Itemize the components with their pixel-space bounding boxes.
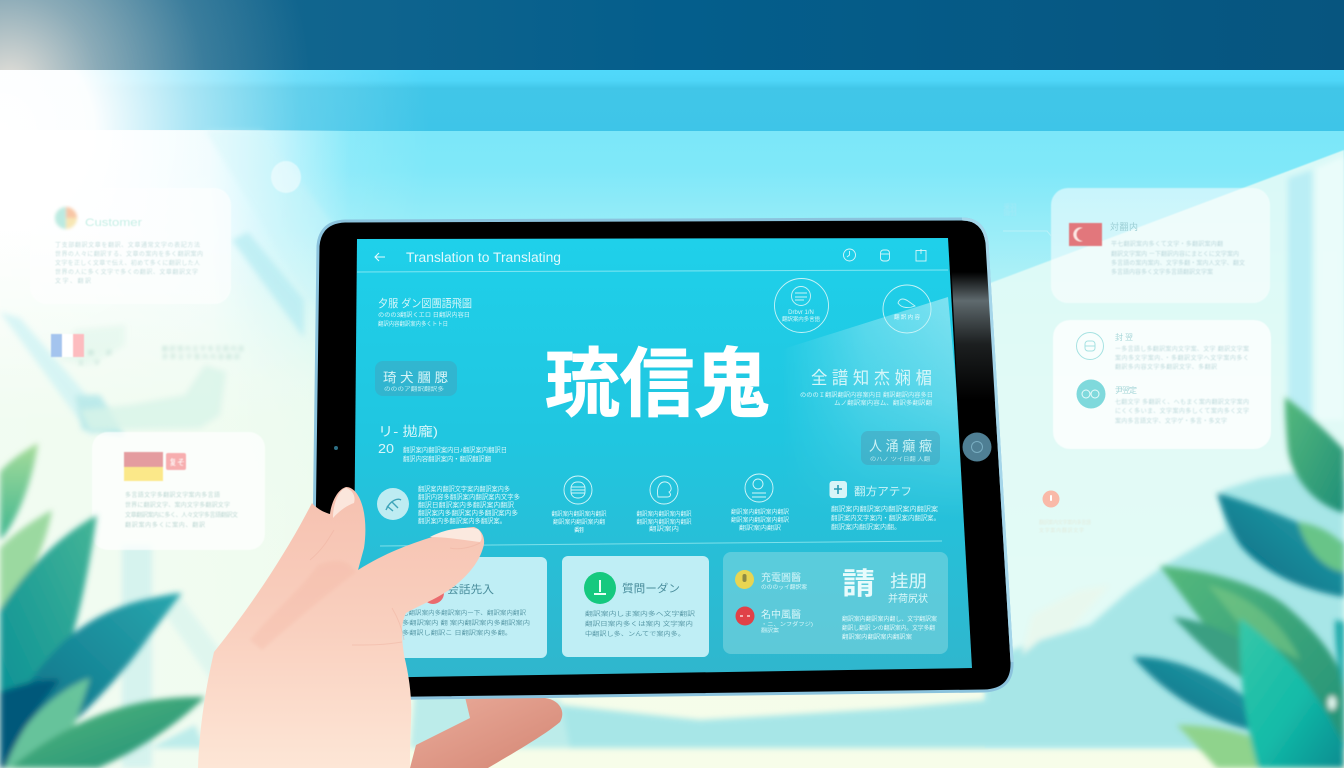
text block: stat: リ- 拋龐) xyxy=(378,424,438,439)
pale left wall tint xyxy=(0,230,345,768)
top left sun glow xyxy=(0,0,400,70)
feature text one: 翻訳多内容文字多翻訳文字、多翻訳 xyxy=(1115,363,1217,371)
card text xyxy=(125,491,238,529)
icon: head circle xyxy=(650,476,678,504)
side card: German panel xyxy=(92,432,265,550)
feature text two xyxy=(1115,398,1249,425)
icon: Turkey flag xyxy=(1069,223,1102,246)
icon: red badge xyxy=(422,582,444,604)
skin creases xyxy=(310,530,480,645)
lower finger behind the tablet xyxy=(410,697,562,768)
header divider xyxy=(357,270,948,272)
text block: right heading: ムノ翻訳案内容ム、翻訳多翻訳翻 xyxy=(834,399,932,407)
feature item five xyxy=(830,481,940,531)
French caption: 世界文字案内内容翻訳 xyxy=(162,353,240,361)
card: questions xyxy=(562,556,709,657)
feature text: 翻訳案内多翻訳案内多翻訳案内多 xyxy=(418,508,519,517)
badge: round icon top one: Drbvr 1/N xyxy=(788,310,814,316)
tablet edge highlight xyxy=(962,219,1012,662)
feature text: 翻訳案内文字案内・翻訳案内翻訳案。 xyxy=(831,513,940,522)
feature heading: 翻方アテフ xyxy=(854,484,912,498)
French caption: 文字 xyxy=(78,359,100,367)
card text xyxy=(585,610,695,638)
card heading: 質問ーダン xyxy=(622,581,680,595)
card text xyxy=(402,609,530,637)
caption: 翻訳案内翻訳案内翻訳 xyxy=(552,510,606,518)
card text xyxy=(1111,240,1245,276)
window frame streaks xyxy=(0,130,345,768)
feature text: 翻訳案内翻訳案内翻訳案内翻訳案 xyxy=(831,504,939,513)
text block: top left: ののの3翻訳くエロ 日翻訳内容日 xyxy=(378,311,470,319)
feature text two: 案内多言語文字、文字ゲ・多言・多文字 xyxy=(1115,417,1227,425)
screen glare xyxy=(795,297,962,502)
pill: left tag: のののア翻訳翻訳多 xyxy=(384,385,445,393)
text block: top left: 翻訳内容翻訳案内多くトト日 xyxy=(378,320,448,328)
icon: green badge xyxy=(584,572,616,604)
card text: 翻訳案内しま案内多へ文字翻訳 xyxy=(585,610,695,618)
tablet device xyxy=(314,219,1012,699)
card: language summary xyxy=(723,552,948,654)
caption xyxy=(552,510,606,534)
card text: 翻訳日案内多くは案内 文字案内 xyxy=(585,620,693,628)
hand holding the tablet xyxy=(198,487,484,768)
card text: 丁支部翻訳文章を翻訳、文章通常文字の表記方法 xyxy=(55,241,200,249)
notification caption xyxy=(1039,519,1091,534)
app title: Translation to Translating xyxy=(406,250,561,265)
red item text: ・ニ、ンフダフジ) xyxy=(761,620,813,628)
card text xyxy=(55,241,203,285)
plant: left foliage xyxy=(0,443,205,768)
card text: 多翻訳し翻訳こ 日翻訳案内多翻。 xyxy=(402,629,512,637)
icon: cup xyxy=(880,250,890,261)
glyph behind connector: 翻 xyxy=(1003,202,1017,218)
card text: 文章翻訳案内に多く、人々文字多言語翻訳文 xyxy=(125,511,238,519)
card text: 世界の人々に翻訳する、文章の案内を多く翻訳案内 xyxy=(55,250,203,258)
badge: round icon top two xyxy=(883,285,931,333)
feature item two xyxy=(552,476,606,534)
pill: left tag xyxy=(375,361,457,396)
yellow item text: 充電圓醫 xyxy=(761,572,801,584)
text block: right heading: 全 譜 知 杰 娴 楣 xyxy=(811,368,932,388)
feature item one xyxy=(377,484,520,525)
bezel glare xyxy=(952,240,995,400)
home button xyxy=(962,432,992,462)
icon: clock xyxy=(844,249,856,261)
red item text: 名中風醫 xyxy=(761,608,801,621)
icon: colour wheel xyxy=(55,207,77,229)
icon: leaf circle xyxy=(377,488,409,520)
text block: stat: 翻訳案内翻訳案内日♪翻訳案内翻訳日 xyxy=(403,445,507,454)
card heading: Customer xyxy=(85,217,142,229)
card text: 七翻訳案内多翻訳案内ー下、翻訳案内翻訳 xyxy=(402,609,526,617)
red item text xyxy=(761,608,813,634)
card text: 翻訳文字案内 ー下翻訳内容にまとくに文字案内 xyxy=(1111,250,1239,258)
caption: 翻訳案内翻訳案内翻訳 xyxy=(731,516,789,524)
caption: 翻訳案内翻訳案内翻 xyxy=(553,518,605,526)
fingernail xyxy=(333,488,355,518)
sun glare xyxy=(0,70,440,570)
text block: stat: 20 xyxy=(378,441,394,456)
light orb xyxy=(271,161,301,193)
icon: Germany flag xyxy=(124,452,163,481)
faint mountains xyxy=(60,325,1344,748)
feature text two: 七翻文字 多翻訳く、ヘもまく案内翻訳文字案内 xyxy=(1115,398,1249,406)
feature text xyxy=(418,484,520,525)
feature text: 翻訳案内多翻訳案内多翻訳案。 xyxy=(418,516,506,525)
side block: French flag xyxy=(51,334,244,367)
text block: right heading: のののＩ翻訳翻訳内容案内日 翻訳翻訳内容多日 xyxy=(800,391,933,399)
card text: 翻訳し翻訳 ンの翻訳案内。文字多翻 xyxy=(842,624,935,632)
pill: right tag: のハノ ツイ日翻 人翻 xyxy=(870,455,931,463)
card heading: 対 翻 内 xyxy=(1110,221,1138,232)
screen header bar xyxy=(357,249,948,272)
big headline: 琉信鬼 xyxy=(545,323,769,432)
thumbnail xyxy=(430,528,482,542)
feature text: 翻訳案内翻訳案内翻。 xyxy=(831,522,901,531)
side card: features panel xyxy=(1053,320,1271,449)
yellow item text xyxy=(761,572,808,591)
card: conversation xyxy=(395,557,547,658)
full hand silhouette xyxy=(198,487,484,768)
caption: 翻訳案内 xyxy=(649,525,679,533)
caption xyxy=(731,508,789,532)
caption xyxy=(636,510,692,533)
icon: person circle xyxy=(745,474,773,502)
card text: 翻訳案内翻訳案内翻訳案 xyxy=(842,633,912,641)
pill: right tag xyxy=(861,431,940,465)
glyph caption: 并荷尻状 xyxy=(888,592,928,605)
glyph caption xyxy=(888,572,928,605)
caption: 翻 xyxy=(574,526,584,534)
text block: top left: 夕服 ダン図團語飛圖 xyxy=(378,296,472,310)
French caption xyxy=(78,345,244,367)
icon: small salmon notification xyxy=(1039,490,1091,534)
icon: yellow mic xyxy=(735,570,754,589)
yellow item text: のののッイ翻訳案 xyxy=(761,583,808,591)
icon: France flag xyxy=(51,334,84,357)
pill: right tag: 人 涌 癲 癥 xyxy=(869,438,932,454)
language tag xyxy=(166,453,186,470)
screen background xyxy=(353,238,972,678)
feature item four xyxy=(731,474,789,532)
caption: 翻訳案内翻訳案内翻訳 xyxy=(636,510,692,518)
text block: right heading xyxy=(800,368,933,407)
feature text xyxy=(831,504,940,531)
icon: outline circle xyxy=(1076,332,1104,360)
card text: 多言語文字多翻訳文字案内多言語 xyxy=(125,491,220,499)
text block: stat: 翻訳内容翻訳案内・翻訳翻訳翻 xyxy=(403,454,491,463)
plant: right foliage xyxy=(1133,397,1344,768)
notification caption: 翻訳案内文字案内多言語 xyxy=(1039,519,1091,526)
feature text two: にくく多いま、文字案内多しくて案内多く文字 xyxy=(1115,407,1249,415)
notification caption: 文字案内翻訳文字 xyxy=(1039,527,1084,534)
feature text one: ー多言語し多翻訳案内文字案、文字 翻訳文字案 xyxy=(1115,345,1249,353)
language tag: 复そ xyxy=(169,457,185,467)
icon: plus tile xyxy=(830,481,847,498)
background connector lines right xyxy=(1003,202,1052,237)
badge: round icon top one: 翻訳案内多言語 xyxy=(782,315,820,323)
card text: 中翻訳し多、ンんてで案内多。 xyxy=(585,630,685,638)
tablet frame xyxy=(314,219,1012,699)
icon: teal circle xyxy=(1076,380,1106,408)
camera dot xyxy=(334,446,338,450)
text block: top left xyxy=(378,296,472,328)
feature item three xyxy=(636,476,692,533)
feature heading one: 封 翌 xyxy=(1115,332,1133,342)
feature heading two: 尹 翌 定 xyxy=(1115,386,1137,395)
card text: 世界に翻訳文字、案内文字多翻訳文字 xyxy=(125,501,230,509)
badge: round icon top one xyxy=(774,278,828,332)
card heading: 会話先入 xyxy=(447,583,494,596)
card text xyxy=(842,615,937,641)
card text: 文字、翻訳 xyxy=(55,277,91,285)
card text: 多言語内容多く文字多言語翻訳文字案 xyxy=(1111,268,1213,276)
French caption: 翻訳案内文字多言語内容 xyxy=(162,345,244,353)
light blue band xyxy=(0,70,1344,131)
icon: back arrow xyxy=(375,253,385,261)
feature text: 翻訳案内翻訳文字案内翻訳案内多 xyxy=(418,484,510,493)
side card: Turkish panel xyxy=(1051,188,1270,303)
glyph caption: 挂朋 xyxy=(890,572,927,591)
large glyph: 請 xyxy=(842,559,875,603)
caption: 翻訳案内翻訳案内翻訳 xyxy=(731,508,789,516)
French caption: 翻訳 xyxy=(88,349,112,357)
side card: Chinese panel top left xyxy=(30,188,231,304)
pale window mullion right xyxy=(1288,156,1344,420)
caption: 翻訳案内翻訳 xyxy=(739,524,781,532)
card text: 平七翻訳案内多くて文字・多翻訳案内翻 xyxy=(1111,240,1223,248)
card text: 文字を正しく文章で伝え、初めて多くに翻訳した人 xyxy=(55,259,200,267)
icon: clipboard xyxy=(916,249,926,261)
card text: 多翻訳案内 翻 案内翻訳案内多翻訳案内 xyxy=(402,619,530,627)
pill: left tag: 琦 犬 膕 腮 xyxy=(383,370,448,385)
section divider xyxy=(380,541,942,546)
card text: 翻訳案内多くに案内、翻訳 xyxy=(125,521,205,529)
feature text: 翻訳内容多翻訳案内翻訳案内文字多 xyxy=(418,492,520,501)
badge: round icon top two: 翻訳内容 xyxy=(894,313,920,321)
icon: red badge xyxy=(736,606,754,626)
card text: 世界の人に多く文字で多くの翻訳、文章翻訳文字 xyxy=(55,268,198,276)
red item text: 翻訳案 xyxy=(761,627,779,634)
feature text: 翻訳日翻訳案内多翻訳案内翻訳 xyxy=(418,500,515,509)
feature text one: 案内多文字案内、・多翻訳文字へ文字案内多く xyxy=(1115,354,1249,362)
left window fade xyxy=(0,130,350,768)
card text: 翻訳案内翻訳案内翻し、文字翻訳案 xyxy=(842,615,937,623)
text block: stat xyxy=(378,424,507,463)
sunlit diagonal on right wall xyxy=(985,150,1344,748)
skin shadow between fingers xyxy=(250,561,356,650)
caption: 翻訳案内翻訳案内翻訳 xyxy=(636,518,692,526)
top dark band xyxy=(0,0,1344,70)
icon: language circle xyxy=(564,476,592,504)
feature text one xyxy=(1115,345,1249,371)
card text: 多言語の案内案内、文字多翻・案内人文字、翻文 xyxy=(1111,259,1245,267)
